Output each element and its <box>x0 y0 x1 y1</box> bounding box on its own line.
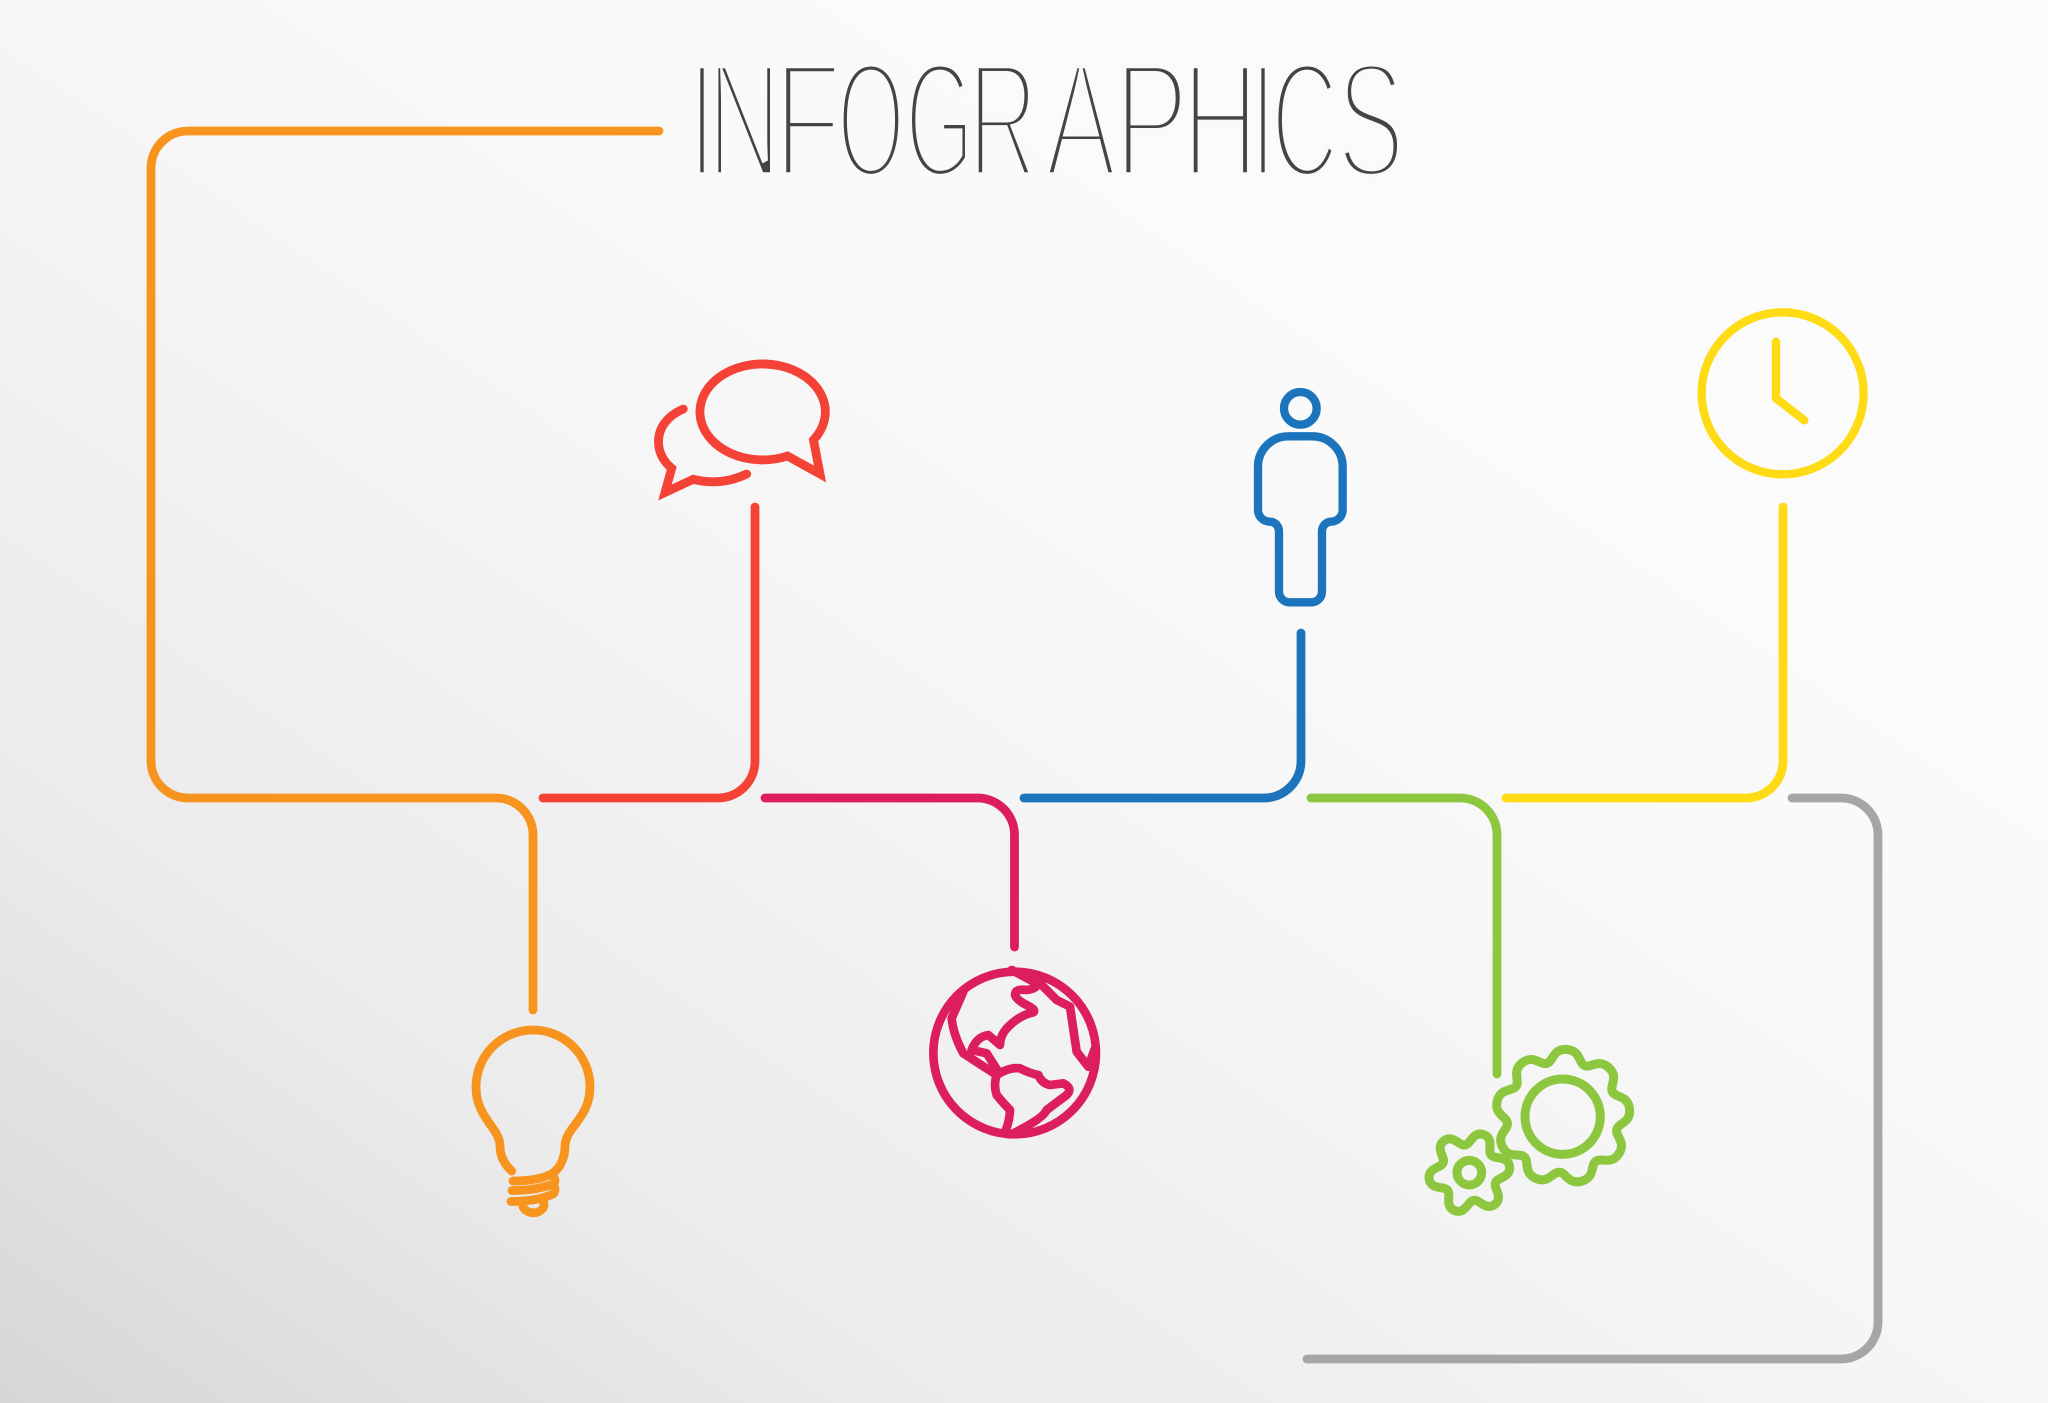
icon: gears <box>1427 1048 1632 1216</box>
title: H <box>1182 28 1259 212</box>
title: N <box>707 28 781 212</box>
connector line: green <box>1311 798 1497 1074</box>
connector line: red <box>543 507 755 798</box>
title: I <box>689 28 715 212</box>
title: F <box>774 28 842 212</box>
connector line: gray <box>1307 798 1878 1359</box>
icon: speech bubbles <box>658 364 825 492</box>
connector line: blue <box>1024 633 1301 798</box>
title: O <box>837 28 905 212</box>
title: R <box>968 28 1038 212</box>
title <box>689 28 1404 212</box>
connector line: magenta <box>765 798 1015 947</box>
icon: light bulb <box>476 1030 590 1213</box>
icon: globe <box>933 970 1096 1134</box>
title: A <box>1044 28 1116 212</box>
title: C <box>1271 28 1338 212</box>
icon: person <box>1258 392 1343 602</box>
title: S <box>1336 28 1404 212</box>
title: P <box>1114 28 1188 212</box>
icon: clock <box>1702 312 1864 474</box>
title: I <box>1250 28 1276 212</box>
connector line: orange <box>151 131 659 1010</box>
title: G <box>904 28 974 212</box>
connector line: yellow <box>1506 507 1783 798</box>
